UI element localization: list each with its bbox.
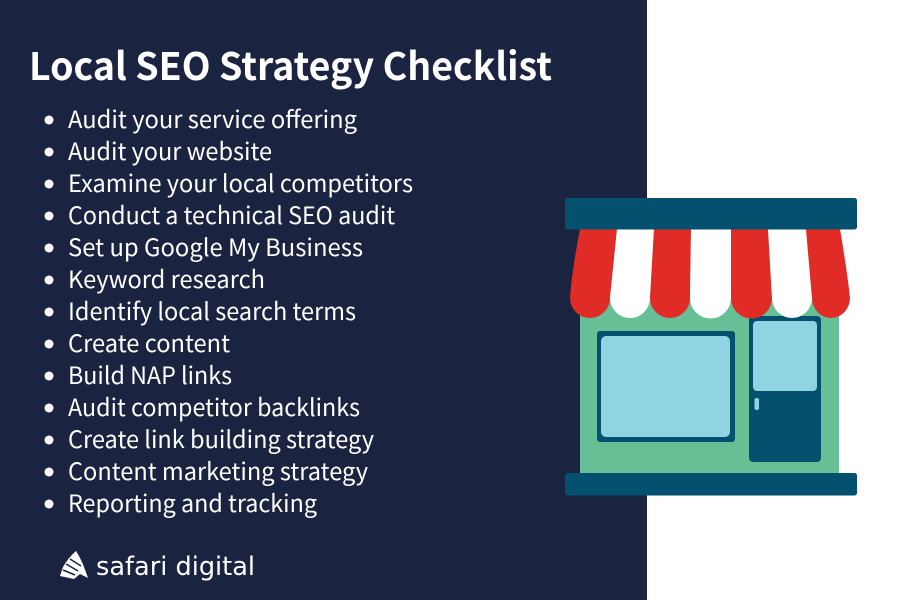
checklist [44,100,413,519]
icon: storefront [565,198,857,496]
item: Conduct a technical SEO audit: Conduct a technical SEO audit [68,196,395,231]
item: Identify local search terms: Identify local search terms [68,292,356,327]
item: Set up Google My Business: Set up Google My Business [68,228,363,263]
door [749,316,821,462]
item: Reporting and tracking: Reporting and tracking [68,484,317,519]
panel: dark background [0,0,647,600]
item: Content marketing strategy: Content marketing strategy [68,452,368,487]
awning stripes [570,229,850,318]
item: Create link building strategy: Create link building strategy [68,420,374,455]
awning top bar [565,198,857,230]
item: Create content: Create content [68,324,230,359]
item: Examine your local competitors: Examine your local competitors [68,164,413,199]
item: Audit your service offering: Audit your service offering [68,100,357,135]
icon: zebra head [60,551,88,579]
building wall [580,229,839,475]
item: Audit your website: Audit your website [68,132,272,167]
item: Audit competitor backlinks: Audit competitor backlinks [68,388,360,423]
item: Keyword research: Keyword research [68,260,265,295]
item: Build NAP links: Build NAP links [68,356,232,391]
title: Local SEO Strategy Checklist [29,36,552,91]
base ledge [565,473,857,496]
shop window [597,331,735,442]
logo wordmark: safari digital [96,552,255,582]
logo: safari digital [60,551,255,582]
